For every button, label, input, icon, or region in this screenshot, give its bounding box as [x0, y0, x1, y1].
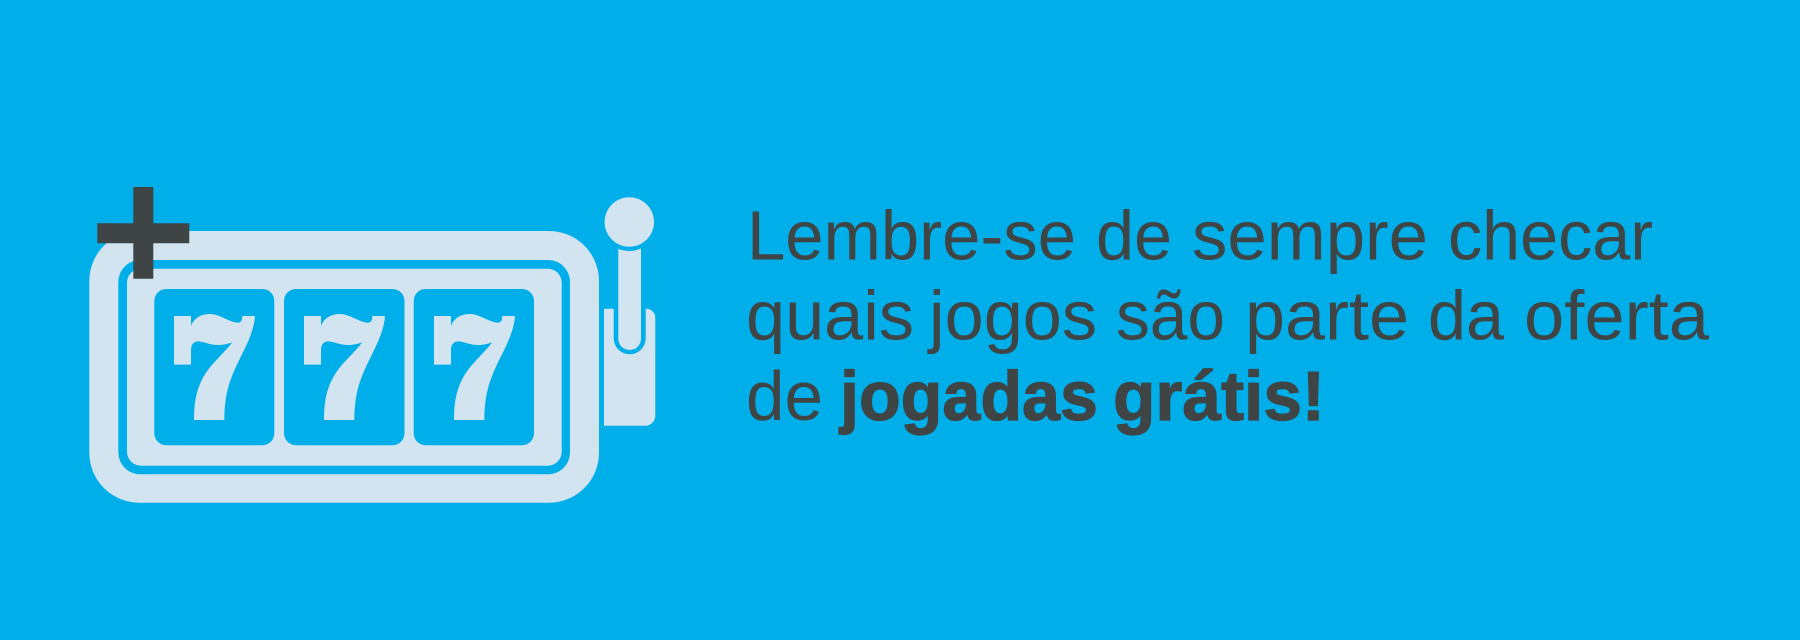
- text line 2: quais: [746, 276, 914, 354]
- text line 1: checar: [1448, 196, 1653, 274]
- reel 2 with seven: [284, 289, 404, 445]
- text line 2: da: [1428, 276, 1504, 354]
- text line 2: jogos: [927, 276, 1097, 354]
- text line 2: são: [1116, 276, 1225, 354]
- text line 1: sempre: [1192, 196, 1428, 274]
- text line 2: oferta: [1524, 276, 1709, 354]
- reel 3 with seven: [414, 289, 534, 445]
- machine body frame: [89, 231, 599, 503]
- text line 2: parte: [1245, 276, 1409, 354]
- message text: [746, 196, 1709, 435]
- icon: slot machine: [89, 187, 658, 503]
- text line 3 with bold emphasis: de: [746, 357, 823, 435]
- reel 1 with seven: [154, 289, 274, 445]
- text line 3 with bold emphasis: jogadas: [838, 357, 1098, 435]
- lever and base: [600, 193, 658, 426]
- text line 1: Lembre-se: [747, 196, 1076, 274]
- icon: plus sign: [97, 187, 189, 279]
- text line 3 with bold emphasis: grátis!: [1113, 357, 1325, 435]
- text line 1: de: [1096, 196, 1172, 274]
